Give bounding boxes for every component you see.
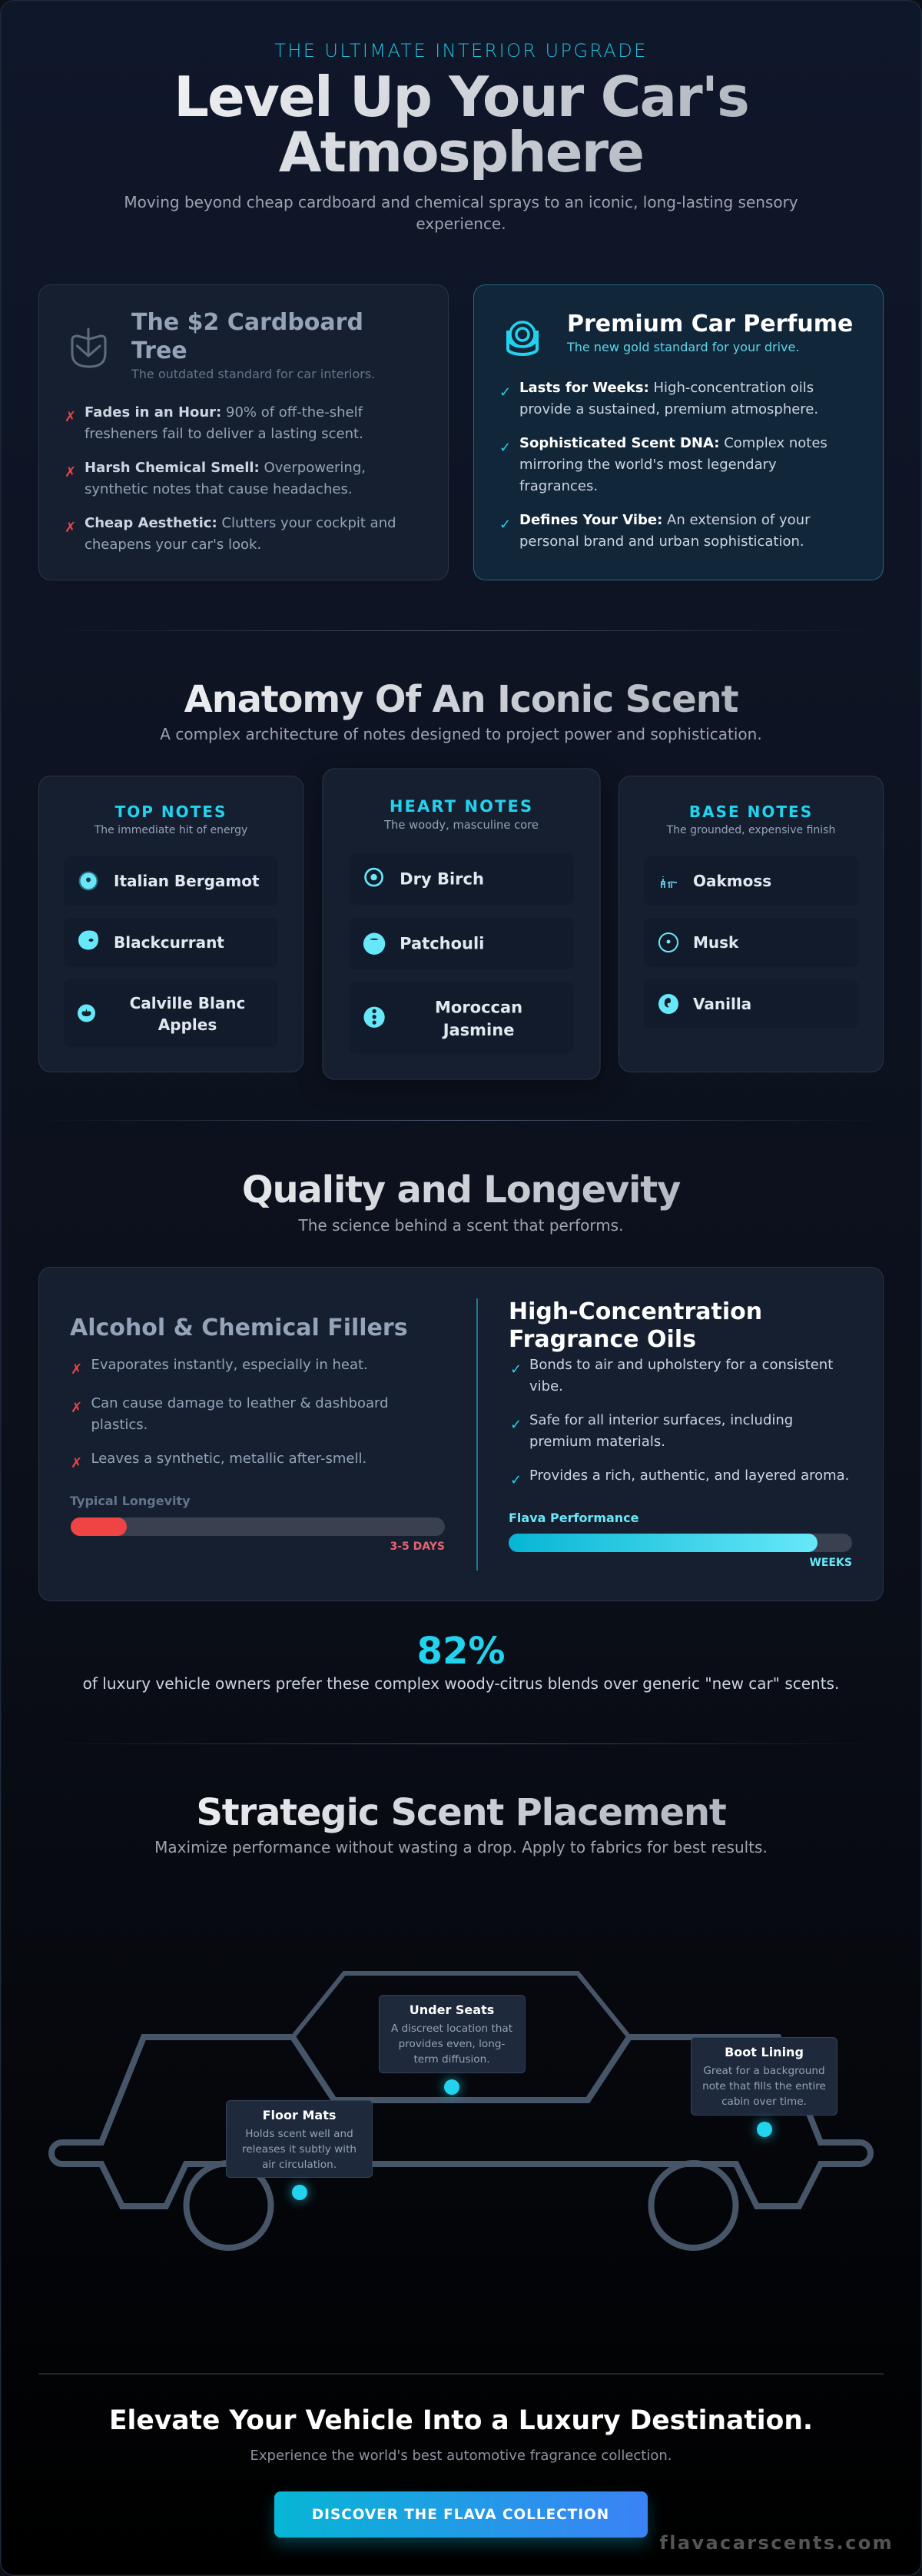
callout: under seats: provides even, long- (399, 2038, 505, 2050)
bar fill: 15 percent (71, 1517, 127, 1536)
note: calville blanc apples: Calville Blanc (130, 994, 245, 1012)
marker: boot lining (757, 2122, 772, 2137)
stat value: 82% (417, 1630, 505, 1673)
list: filler drawbacks: ✗ (71, 1361, 82, 1378)
note: vanilla (644, 979, 858, 1029)
icon: vanilla (658, 994, 678, 1014)
icon: jasmine (363, 1007, 385, 1028)
title: Level Up Your Car's (174, 65, 748, 129)
heading: HEART NOTES (389, 796, 533, 816)
list: cardboard drawbacks: synthetic notes that cause headaches. (85, 481, 353, 497)
heading (131, 309, 363, 364)
heading: Fragrance Oils (509, 1326, 696, 1353)
panel: heart notes (322, 768, 600, 1080)
list: premium benefits: personal brand and urban sophistication. (519, 533, 804, 550)
list: filler drawbacks: Can cause damage to leather & dashboard (91, 1395, 389, 1411)
callout: boot lining (691, 2037, 837, 2116)
icon: apple (78, 1004, 95, 1022)
title: Atmosphere (279, 120, 643, 184)
list: cardboard drawbacks: ✗ (65, 464, 76, 480)
label: flava performance: Flava Performance (509, 1511, 639, 1525)
heading: Premium Car Perfume (567, 311, 853, 337)
diagram: car placement (48, 1971, 874, 2251)
footer subheading: Experience the world's best automotive fragrance collection. (250, 2448, 672, 2464)
section subheading: placement: Maximize performance without wasting a drop. Apply to fabrics for best results. (154, 1838, 768, 1856)
icon: dry birch (364, 867, 383, 887)
note: oakmoss: Oakmoss (693, 872, 771, 890)
callout: boot lining: Great for a background (703, 2065, 825, 2077)
note: musk (644, 918, 858, 967)
list: filler drawbacks: Evaporates instantly, especially in heat. (91, 1357, 368, 1373)
list: cardboard drawbacks: Cheap Aesthetic: Clutters your cockpit and (85, 515, 396, 531)
note: italian bergamot (64, 856, 278, 906)
callout: boot lining: Boot Lining (725, 2045, 804, 2059)
bar: typical longevity (71, 1517, 445, 1536)
value: 3-5 days: 3-5 DAYS (390, 1541, 445, 1553)
list: cardboard drawbacks: Fades in an Hour: 90% of off-the-shelf (85, 404, 363, 420)
icon: musk (658, 932, 678, 952)
list: premium benefits: Defines Your Vibe: An extension of your (519, 512, 810, 528)
icon: blackcurrant (78, 930, 98, 950)
stat: 82 percent (83, 1630, 839, 1693)
list: premium benefits: ✓ (499, 440, 511, 456)
note: blackcurrant: Blackcurrant (114, 933, 224, 952)
list: premium benefits: mirroring the world's most legendary (519, 457, 777, 473)
list: cardboard drawbacks: cheapens your car's look. (85, 537, 261, 553)
icon: premium perfume (506, 321, 539, 356)
section heading: placement: Strategic Scent Placement (196, 1791, 726, 1834)
subtitle (124, 193, 798, 233)
subheading: The new gold standard for your drive. (567, 340, 799, 354)
callout: floor mats: Floor Mats (263, 2108, 336, 2122)
car outline (48, 1971, 874, 2251)
icon: oakmoss (661, 876, 677, 888)
list: filler drawbacks: ✗ (71, 1400, 82, 1416)
title (38, 69, 884, 180)
icon: bergamot (78, 872, 98, 890)
list: premium benefits: ✓ (499, 384, 511, 401)
icon: patchouli (363, 933, 386, 955)
list: oil benefits: ✓ (510, 1361, 522, 1378)
list: filler drawbacks: plastics. (91, 1417, 148, 1433)
section heading: anatomy: Anatomy Of An Iconic Scent (184, 678, 738, 721)
list: oil benefits: Safe for all interior surfaces, including (529, 1412, 793, 1428)
note: moroccan jasmine: Moroccan (434, 998, 522, 1017)
list: oil benefits: ✓ (510, 1417, 522, 1433)
subheading: The immediate hit of energy (95, 824, 247, 836)
note: calville blanc apples (64, 979, 278, 1047)
callout: under seats: Under Seats (410, 2003, 494, 2017)
list: premium benefits: ✓ (499, 517, 511, 533)
panel: top notes (38, 776, 303, 1072)
heading: BASE NOTES (689, 803, 813, 821)
callout: floor mats: releases it subtly with (242, 2143, 357, 2156)
watermark: flavacarscents.com (659, 2532, 894, 2554)
list: oil benefits: premium materials. (529, 1434, 665, 1450)
list: filler drawbacks (71, 1357, 389, 1471)
callout: boot lining: cabin over time. (721, 2096, 807, 2108)
heading: High-Concentration (509, 1298, 762, 1325)
heading: Tree (131, 337, 187, 364)
callout: floor mats (226, 2100, 373, 2178)
column: fragrance oils (476, 1298, 861, 1571)
heading: Alcohol & Chemical Fillers (70, 1315, 408, 1341)
list: cardboard drawbacks: ✗ (65, 520, 76, 536)
heading: TOP NOTES (115, 803, 227, 821)
callout: floor mats: air circulation. (262, 2159, 337, 2171)
bar fill: 90 percent (509, 1534, 818, 1552)
button: DISCOVER THE FLAVA COLLECTION (312, 2507, 609, 2523)
note: moroccan jasmine: Jasmine (443, 1020, 514, 1039)
list: cardboard drawbacks: ✗ (65, 409, 76, 425)
note: italian bergamot: Italian Bergamot (114, 872, 260, 890)
list: premium benefits: Sophisticated Scent DNA: Complex notes (519, 435, 827, 451)
icon: cardboard tree (71, 327, 106, 367)
subheading: The grounded, expensive finish (667, 824, 835, 836)
marker: floor mats (292, 2185, 307, 2200)
button (274, 2491, 647, 2538)
note: oakmoss (644, 856, 858, 906)
panel: premium car perfume (473, 284, 884, 580)
list: filler drawbacks: Leaves a synthetic, metallic after-smell. (91, 1451, 366, 1467)
list: oil benefits: Provides a rich, authentic, and layered aroma. (529, 1467, 849, 1484)
note: patchouli (349, 918, 573, 969)
callout: under seats: term diffusion. (413, 2053, 490, 2066)
subtitle: Moving beyond cheap cardboard and chemical sprays to an iconic, long-lasting sensory (124, 193, 798, 211)
list: oil benefits: ✓ (510, 1472, 522, 1488)
bar: flava performance (509, 1534, 852, 1552)
list: premium benefits (499, 380, 827, 550)
column: alcohol fillers (70, 1315, 445, 1553)
heading: The $2 Cardboard (131, 309, 363, 336)
note: moroccan jasmine (349, 982, 573, 1053)
subtitle: experience. (416, 214, 506, 233)
eyebrow: THE ULTIMATE INTERIOR UPGRADE (274, 40, 648, 61)
list: premium benefits: fragrances. (519, 478, 598, 494)
note: vanilla: Vanilla (693, 995, 751, 1013)
list: premium benefits: Lasts for Weeks: High-concentration oils (519, 380, 814, 396)
list: cardboard drawbacks: Harsh Chemical Smell: Overpowering, (85, 460, 366, 476)
callout: floor mats: Holds scent well and (245, 2128, 353, 2140)
subheading: The outdated standard for car interiors. (131, 367, 375, 381)
note: musk: Musk (693, 933, 738, 952)
value: weeks: WEEKS (809, 1557, 852, 1569)
panel: cardboard tree (38, 284, 449, 580)
footer heading: Elevate Your Vehicle Into a Luxury Destination. (109, 2405, 813, 2436)
stat caption: of luxury vehicle owners prefer these complex woody-citrus blends over generic "new car" scents. (83, 1674, 839, 1693)
note: patchouli: Patchouli (400, 934, 484, 953)
note: dry birch (349, 853, 573, 905)
list: oil benefits (510, 1357, 849, 1488)
list: cardboard drawbacks: fresheners fail to deliver a lasting scent. (85, 426, 363, 442)
list: filler drawbacks: ✗ (71, 1455, 82, 1471)
label: typical longevity: Typical Longevity (70, 1494, 191, 1508)
marker: under seats (444, 2079, 459, 2095)
heading (509, 1298, 762, 1353)
note: calville blanc apples: Apples (158, 1015, 217, 1034)
section subheading: anatomy: A complex architecture of notes designed to project power and sophistication. (160, 725, 762, 743)
panel: base notes (619, 776, 884, 1072)
callout: under seats: A discreet location that (391, 2023, 512, 2035)
subheading: The woody, masculine core (384, 819, 538, 832)
note: dry birch: Dry Birch (400, 869, 483, 889)
section heading: quality: Quality and Longevity (242, 1168, 680, 1212)
note: blackcurrant (64, 918, 278, 967)
list: premium benefits: provide a sustained, premium atmosphere. (519, 401, 818, 417)
callout: boot lining: note that fills the entire (702, 2080, 826, 2092)
list: oil benefits: vibe. (529, 1378, 563, 1394)
section subheading: quality: The science behind a scent that performs. (299, 1216, 623, 1235)
list: oil benefits: Bonds to air and upholstery for a consistent (529, 1357, 833, 1373)
list: cardboard drawbacks (65, 404, 396, 553)
panel: comparison (38, 1267, 884, 1601)
callout: under seats (378, 1995, 526, 2073)
